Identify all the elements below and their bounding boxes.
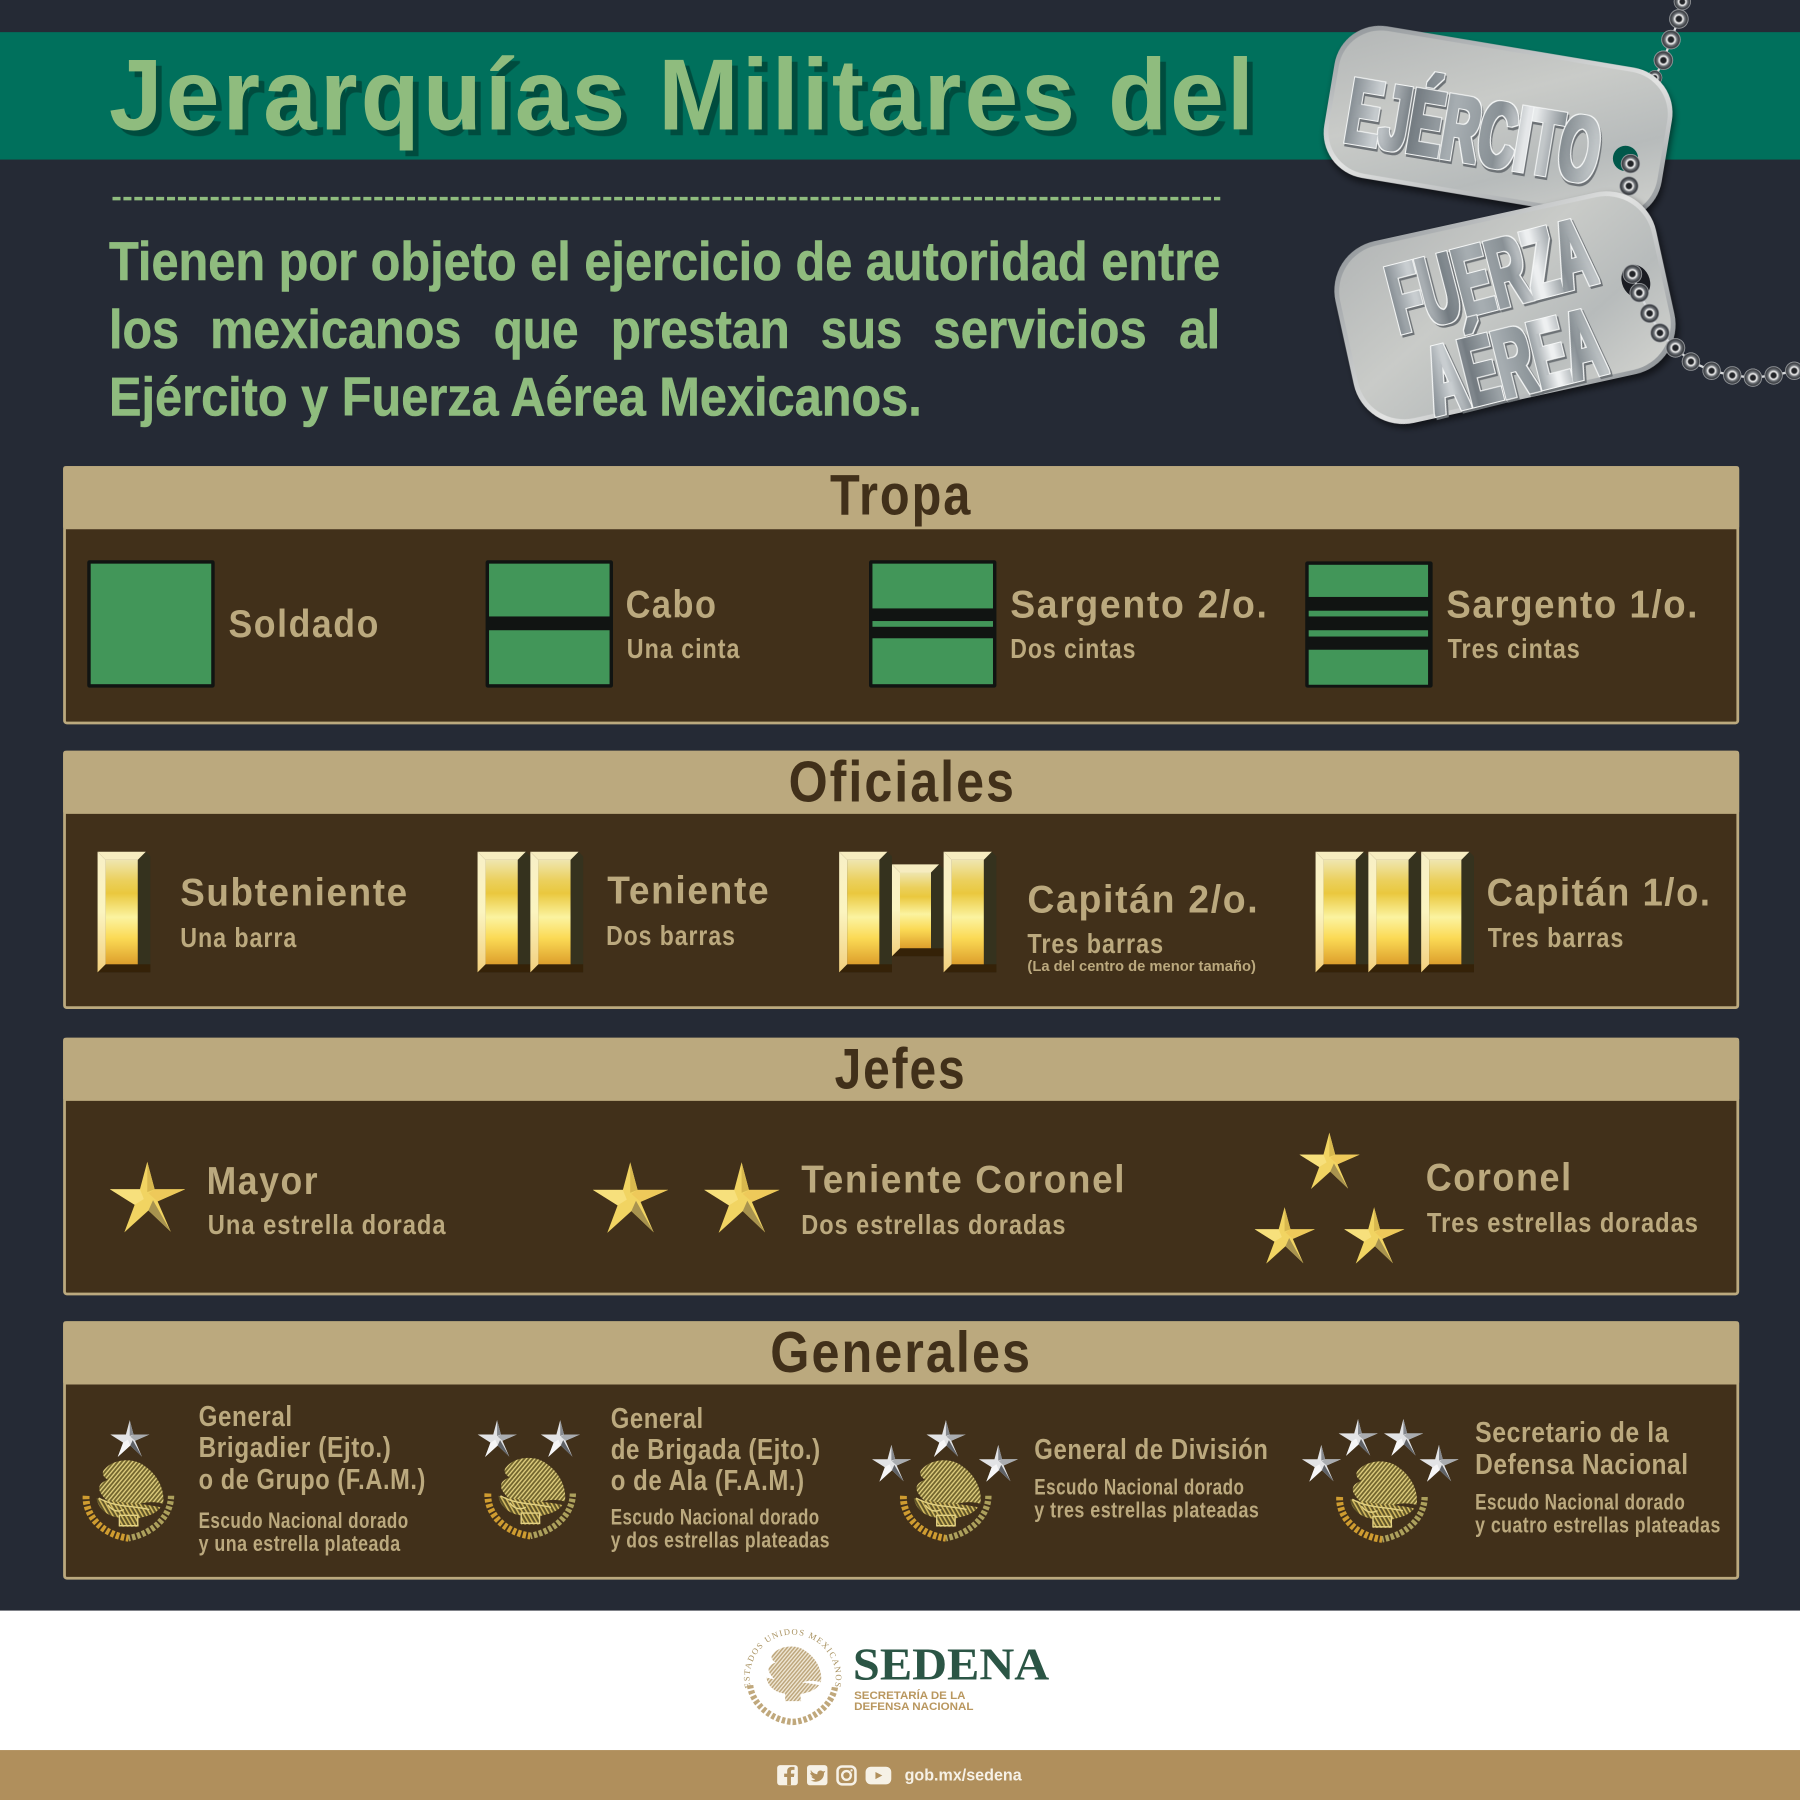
rank: capitán 1/o <box>1316 852 1712 972</box>
panel: jefes <box>63 1037 1739 1294</box>
sedena wordmark <box>853 1638 1049 1713</box>
rank: sargento 2/o: Sargento 2/o. <box>1010 584 1268 627</box>
title: Jerarquías Militares del <box>109 40 1257 152</box>
intro paragraph: servicios <box>933 298 1147 360</box>
rank: secretario <box>1302 1417 1721 1539</box>
rank: general de brigada <box>478 1403 830 1552</box>
rank: cabo <box>486 560 740 688</box>
rank: general brigadier: Brigadier (Ejto.) <box>199 1432 391 1464</box>
panel: generales <box>63 1321 1739 1578</box>
rank: sargento 1/o: Tres cintas <box>1448 633 1581 664</box>
intro paragraph: Ejército y Fuerza Aérea Mexicanos. <box>109 366 922 428</box>
rank: capitán 1/o: Tres barras <box>1488 922 1624 953</box>
hole and beads of upper tag <box>1613 146 1640 196</box>
rank: general brigadier <box>86 1401 426 1556</box>
rank: general de división: y tres estrellas plateadas <box>1034 1498 1259 1523</box>
tag lettering <box>1378 199 1614 436</box>
rank: mayor <box>110 1160 447 1240</box>
intro paragraph: mexicanos <box>210 298 461 360</box>
rank: sargento 1/o <box>1305 561 1699 688</box>
intro paragraph: que <box>494 298 579 360</box>
heading: tropa: Tropa <box>830 463 972 527</box>
rank: capitán 2/o <box>839 852 1259 975</box>
footer: social bar <box>0 1750 1800 1800</box>
upper chain <box>1647 0 1691 85</box>
heading: jefes: Jefes <box>835 1037 967 1101</box>
rank: teniente coronel <box>593 1159 1126 1240</box>
tag lettering: AÉREA <box>1415 289 1614 436</box>
rank: capitán 2/o: Tres barras <box>1027 928 1164 959</box>
rank: subteniente: Subteniente <box>180 872 409 915</box>
dog tags and chain <box>1317 0 1800 436</box>
website: gob.mx/sedena <box>905 1765 1022 1784</box>
icon: instagram <box>838 1766 855 1784</box>
rank: soldado <box>87 560 380 688</box>
rank: capitán 1/o: Capitán 1/o. <box>1487 872 1712 915</box>
intro paragraph: prestan <box>611 298 790 360</box>
panel: oficiales <box>63 750 1739 1008</box>
rank: subteniente <box>98 852 409 972</box>
icon: facebook <box>777 1765 798 1785</box>
intro paragraph: Tienen por objeto el ejercicio de autoridad entre <box>109 230 1220 292</box>
rank: teniente: Dos barras <box>606 920 736 951</box>
footer: white logo band <box>0 1610 1800 1750</box>
rank: general de división: Escudo Nacional dorado <box>1034 1475 1244 1500</box>
tag: fuerza aérea <box>1325 182 1685 434</box>
rank: teniente coronel: Teniente Coronel <box>801 1159 1126 1202</box>
rank: cabo: Una cinta <box>627 633 740 664</box>
rank: secretario: Secretario de la <box>1475 1417 1669 1449</box>
rank: general de brigada: y dos estrellas plateadas <box>611 1527 830 1552</box>
rank: general de brigada: Escudo Nacional dorado <box>611 1504 820 1529</box>
rank: secretario: Escudo Nacional dorado <box>1475 1490 1685 1515</box>
rank: sargento 2/o: Dos cintas <box>1010 633 1136 664</box>
rank: coronel: Coronel <box>1426 1156 1573 1199</box>
intro paragraph: los <box>109 298 179 360</box>
rank: secretario: y cuatro estrellas plateadas <box>1475 1513 1721 1538</box>
rank: subteniente: Una barra <box>180 922 297 953</box>
sedena wordmark: SECRETARÍA DE LA <box>854 1689 965 1702</box>
tag: ejército <box>1317 19 1679 227</box>
rank: coronel: Tres estrellas doradas <box>1427 1207 1699 1238</box>
rank: sargento 2/o <box>869 560 1268 688</box>
intro paragraph: al <box>1179 298 1220 360</box>
icon: national seal: ESTADOS UNIDOS MEXICANOS <box>744 1629 842 1688</box>
rank: capitán 2/o: (La del centro de menor tamaño) <box>1027 958 1256 975</box>
sedena wordmark: DEFENSA NACIONAL <box>854 1701 973 1713</box>
rank: secretario: Defensa Nacional <box>1475 1449 1689 1481</box>
lower chain <box>1616 260 1800 387</box>
icon: national seal <box>744 1629 842 1726</box>
rank: teniente: Teniente <box>607 869 770 912</box>
rank: general de división <box>872 1420 1268 1538</box>
rank: general brigadier: Escudo Nacional dorado <box>199 1508 409 1533</box>
rank: general de brigada: o de Ala (F.A.M.) <box>611 1465 805 1497</box>
rank: general de división: General de División <box>1034 1434 1268 1466</box>
tag: ejército: EJÉRCITO <box>1339 59 1608 203</box>
heading: oficiales: Oficiales <box>789 750 1016 814</box>
rank: general de brigada: de Brigada (Ejto.) <box>611 1434 821 1466</box>
rank: soldado: Soldado <box>228 603 380 646</box>
rank: sargento 1/o: Sargento 1/o. <box>1446 584 1699 627</box>
tag lettering: FUERZA <box>1378 199 1605 354</box>
rank: coronel <box>1255 1133 1699 1264</box>
rank: general de brigada: General <box>611 1403 704 1435</box>
panel: tropa <box>63 463 1739 723</box>
rank: general brigadier: y una estrella plateada <box>199 1531 401 1556</box>
sedena wordmark: SEDENA <box>853 1638 1049 1689</box>
icon: youtube <box>866 1767 891 1784</box>
icon: twitter <box>807 1765 827 1785</box>
rank: teniente coronel: Dos estrellas doradas <box>801 1209 1066 1240</box>
rank: mayor: Mayor <box>207 1160 319 1203</box>
intro paragraph <box>109 230 1220 428</box>
rank: mayor: Una estrella dorada <box>208 1209 447 1240</box>
rank: capitán 2/o: Capitán 2/o. <box>1027 879 1259 922</box>
header band <box>0 32 1800 160</box>
rank: general brigadier: o de Grupo (F.A.M.) <box>199 1464 426 1496</box>
rank: general brigadier: General <box>199 1401 293 1433</box>
intro paragraph: sus <box>821 298 902 360</box>
rank: teniente <box>478 852 770 972</box>
rank: cabo: Cabo <box>626 584 717 627</box>
heading: generales: Generales <box>770 1321 1032 1385</box>
